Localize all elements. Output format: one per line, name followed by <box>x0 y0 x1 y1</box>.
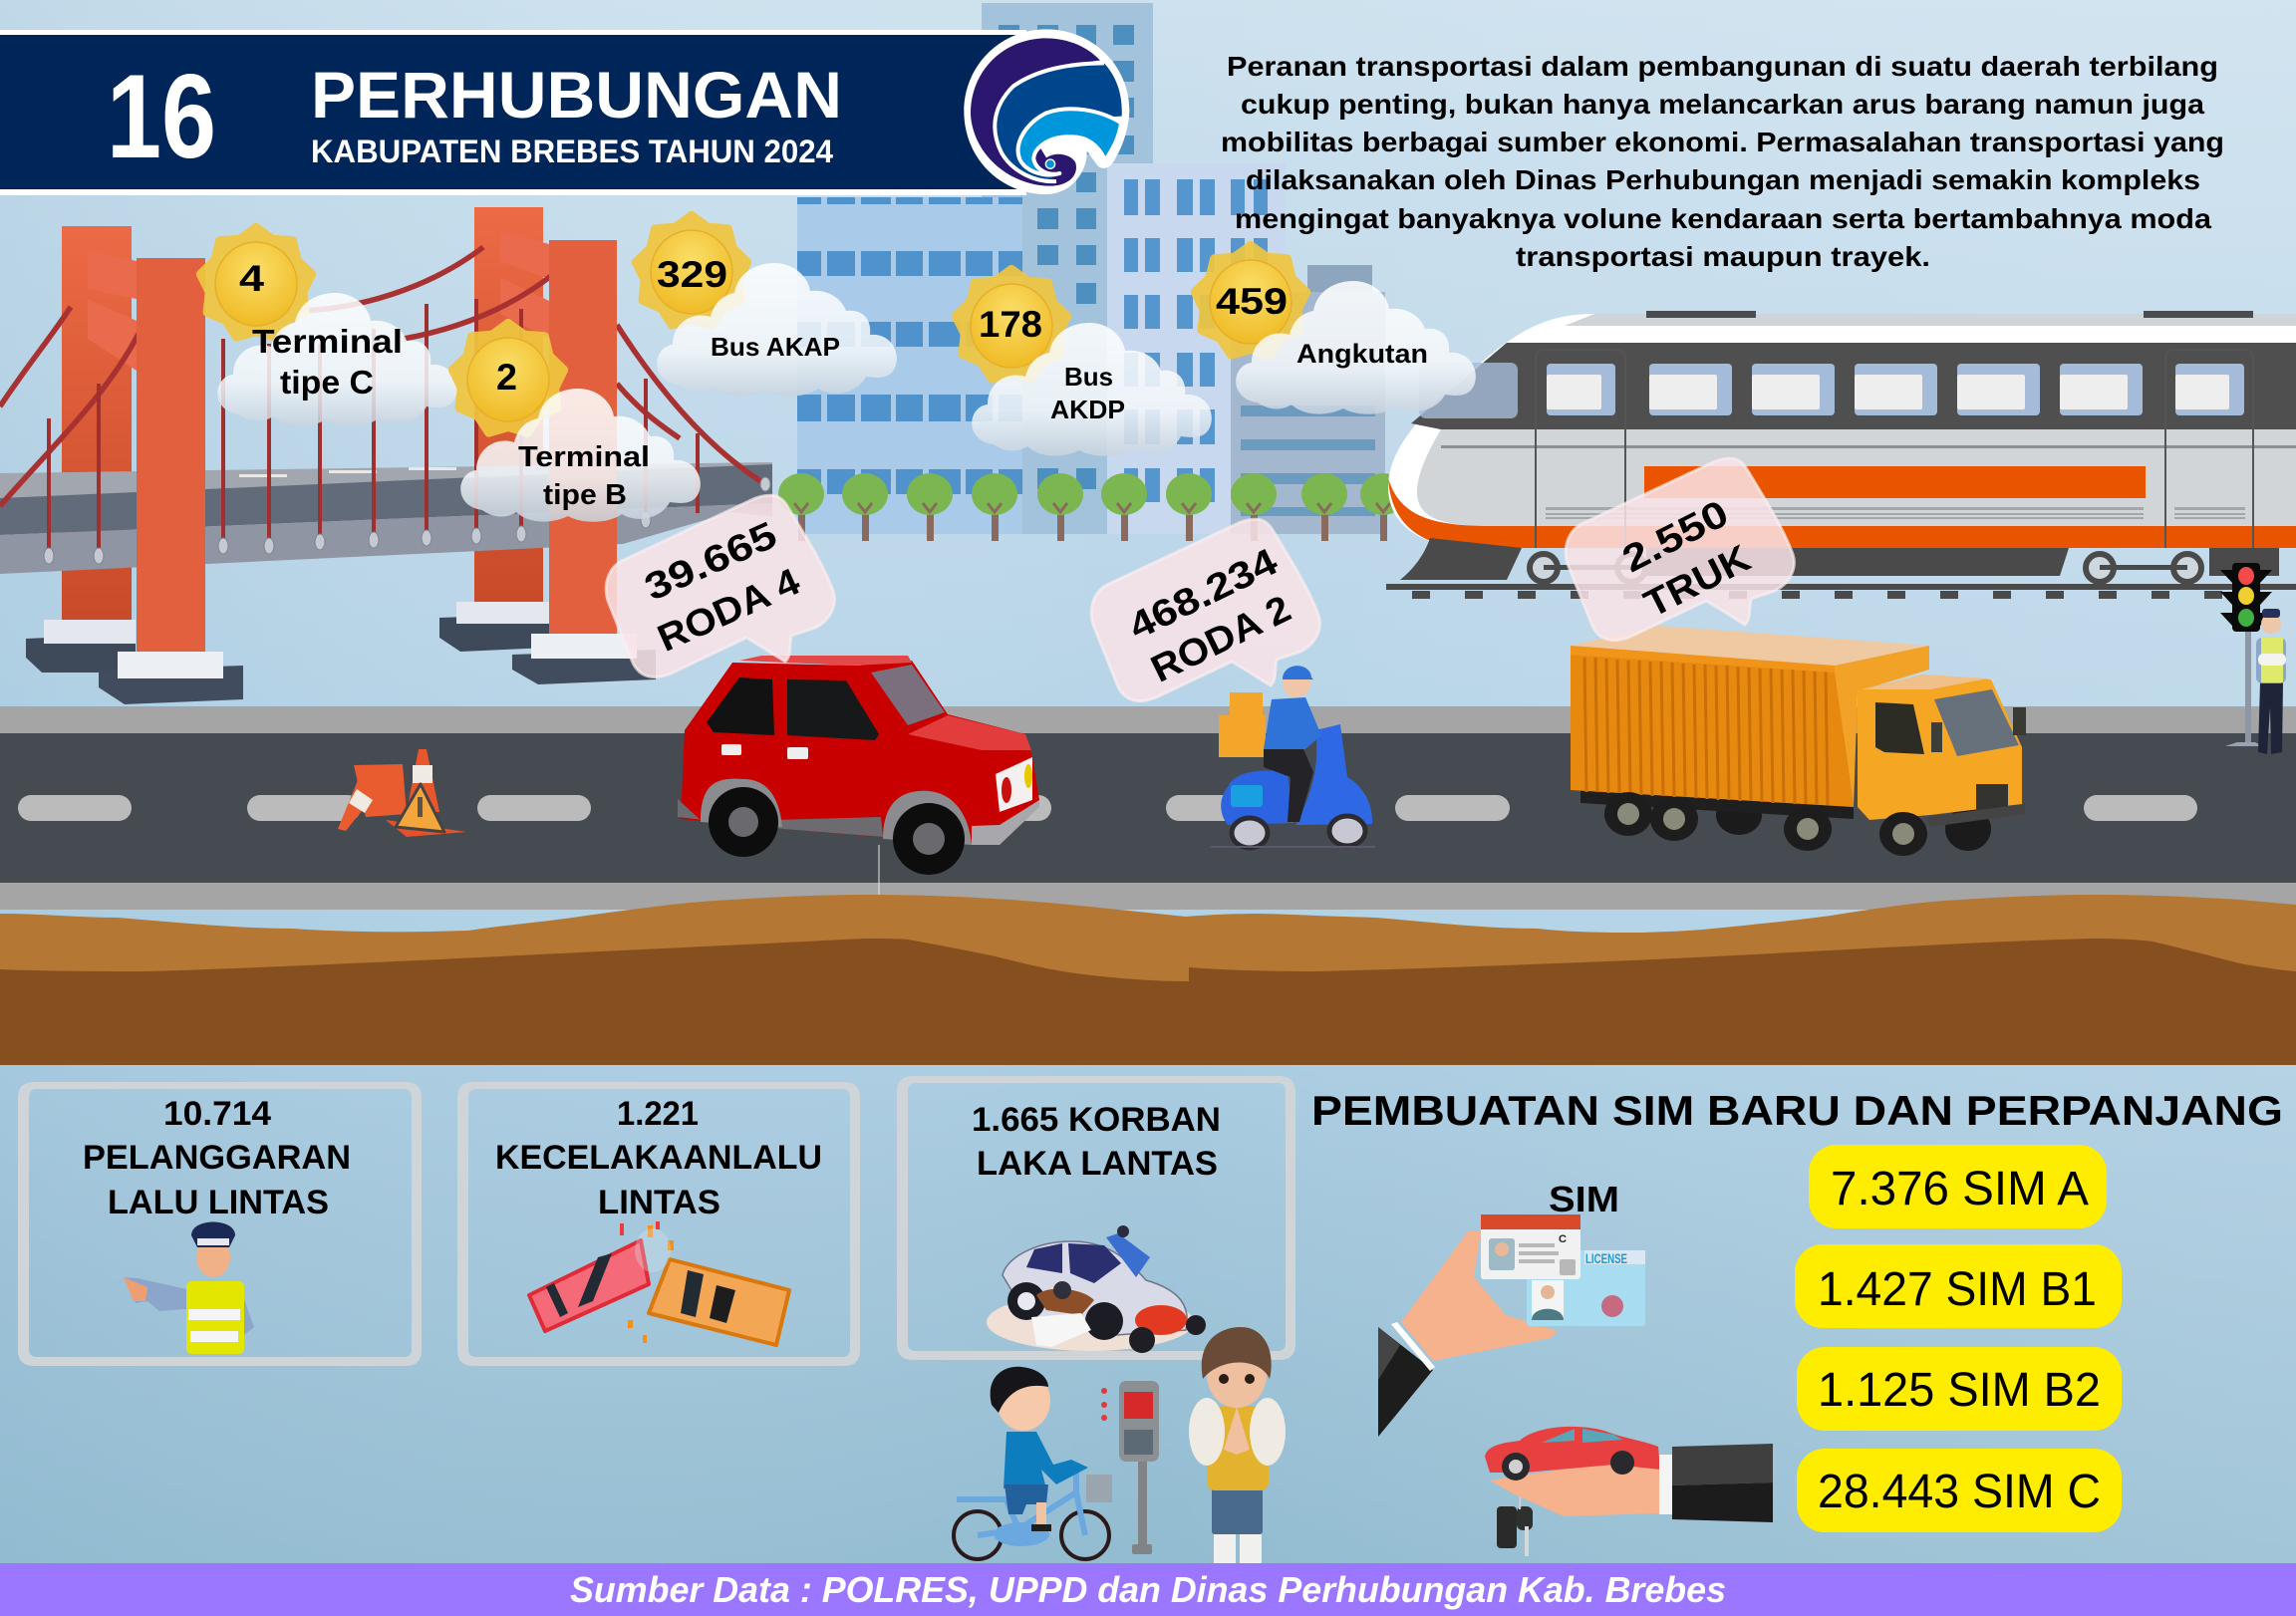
scooter rear body <box>1221 771 1293 825</box>
stat: bus AKDP: AKDP <box>1050 395 1125 424</box>
tower cross beams <box>88 231 549 371</box>
label: SIM: SIM <box>1549 1179 1619 1219</box>
icon: road accident scene <box>987 1225 1206 1353</box>
pill: SIM A: 7.376 SIM A <box>1831 1163 2089 1215</box>
intro paragraph: mobilitas berbagai sumber ekonomi. Permasalahan transportasi yang <box>1221 127 2224 157</box>
panel text: LINTAS <box>598 1184 720 1221</box>
delivery scooter rider <box>1211 666 1375 848</box>
open hand <box>1490 1455 1659 1516</box>
pill: SIM A <box>1809 1145 2107 1228</box>
panel: korban laka lantas <box>897 1076 1295 1360</box>
licence card red <box>1481 1214 1580 1279</box>
stat: angkutan: 459 <box>1216 281 1288 322</box>
stat: bus AKAP: 329 <box>657 254 727 295</box>
car roof <box>739 656 912 666</box>
train stripe and vents <box>1536 350 2253 548</box>
pill: SIM B2: 1.125 SIM B2 <box>1818 1364 2101 1417</box>
stat: bus AKDP <box>957 270 1212 456</box>
pill: SIM B1 <box>1795 1244 2122 1328</box>
intro paragraph: dilaksanakan oleh Dinas Perhubungan menjadi semakin kompleks <box>1246 164 2200 195</box>
licence card blue <box>1527 1250 1645 1326</box>
train <box>1386 311 2296 599</box>
callout: truk <box>1566 458 1794 641</box>
building: grey block <box>1231 265 1385 534</box>
car front panel <box>996 757 1032 812</box>
railway track <box>1386 584 2296 599</box>
car hood <box>908 715 1031 750</box>
stat: bus AKDP: Bus <box>1064 362 1113 392</box>
sleeve <box>1378 1322 1435 1437</box>
hanger anchors <box>44 477 770 564</box>
pill: SIM B2 <box>1797 1347 2122 1431</box>
illustration: hand holding car and keys <box>1485 1427 1773 1556</box>
stat: angkutan <box>1196 246 1476 414</box>
traffic officer <box>2256 609 2286 754</box>
stat: bus AKAP <box>637 216 897 397</box>
panel text <box>495 1095 822 1221</box>
road <box>0 706 2296 910</box>
shirt cuff <box>1659 1455 1672 1514</box>
panel text: 10.714 <box>163 1095 271 1133</box>
greeting boy illustration <box>1189 1327 1286 1563</box>
train windows <box>1419 363 2244 418</box>
car wheels <box>701 779 972 875</box>
train undercarriage <box>1400 538 2279 582</box>
panel text <box>972 1101 1221 1183</box>
rider head <box>1283 666 1313 697</box>
footer source bar: Sumber Data : POLRES, UPPD dan Dinas Perhubungan Kab. Brebes <box>570 1569 1726 1610</box>
ministry logo <box>964 29 1129 194</box>
truck wheels <box>1604 792 1927 856</box>
car windows <box>707 665 945 740</box>
panel text: 1.221 <box>617 1095 699 1133</box>
callout: roda 2: RODA 2 <box>1145 588 1297 691</box>
stat: bus AKAP: Bus AKAP <box>711 332 840 362</box>
hanger cables <box>49 299 698 553</box>
intro paragraph: Peranan transportasi dalam pembangunan di suatu daerah terbilang <box>1227 51 2218 82</box>
pill: SIM B1: 1.427 SIM B1 <box>1818 1263 2097 1316</box>
intro paragraph: transportasi maupun trayek. <box>1516 241 1930 272</box>
panel text: LAKA LANTAS <box>977 1145 1218 1183</box>
panel text: LALU LINTAS <box>108 1184 329 1221</box>
callout: truk: 2.550 <box>1616 493 1735 581</box>
panel text <box>83 1095 351 1221</box>
intro paragraph <box>1221 51 2224 272</box>
truck rear wheels <box>1716 795 1991 851</box>
stat: terminal tipe C: Terminal <box>252 323 403 360</box>
panel text: PELANGGARAN <box>83 1139 351 1177</box>
banner subtitle: KABUPATEN BREBES TAHUN 2024 <box>311 134 833 169</box>
building: tall back tower <box>982 3 1153 534</box>
train roof equipment <box>1646 311 2253 318</box>
callout: roda 4: 39.665 <box>639 514 783 610</box>
city buildings <box>797 3 1385 534</box>
back towers <box>62 207 543 627</box>
footer source bar <box>0 1563 2296 1616</box>
building: light right tower <box>1107 163 1286 534</box>
rider legs <box>1264 749 1313 822</box>
SIM count pills <box>1795 1145 2122 1532</box>
stat: bus AKDP: 178 <box>979 304 1042 345</box>
header banner <box>0 30 1026 195</box>
stat: terminal tipe C <box>201 228 457 426</box>
stat: terminal tipe C: 4 <box>239 258 265 299</box>
panel: pelanggaran lalu lintas <box>18 1082 422 1366</box>
delivery boxes <box>1219 692 1266 757</box>
small red car <box>1485 1427 1660 1481</box>
front towers <box>137 240 617 659</box>
orange truck <box>1571 626 2026 856</box>
callout: truk: TRUK <box>1638 537 1758 626</box>
icon: police officer blowing whistle <box>124 1221 254 1354</box>
callout: roda 2 <box>1091 519 1319 701</box>
section number: 16 <box>107 50 216 183</box>
traffic light <box>2220 563 2272 746</box>
train body <box>1388 314 2296 548</box>
truck chassis <box>1580 790 1854 819</box>
building: wide left block <box>797 197 1022 534</box>
red car <box>678 656 1039 895</box>
banner title: PERHUBUNGAN <box>311 58 842 132</box>
suspension bridge <box>0 207 772 704</box>
callout: roda 4 <box>606 495 834 677</box>
traffic cones and warning sign <box>338 749 466 837</box>
scooter front <box>1295 724 1372 825</box>
ground hills <box>0 895 2296 1065</box>
stat: terminal tipe C: tipe C <box>280 364 374 401</box>
main cables <box>0 247 765 506</box>
stat: terminal tipe B: Terminal <box>518 441 650 473</box>
callout: roda 2: 468.234 <box>1122 541 1285 649</box>
illustration: hand holding licences <box>1378 1214 1645 1437</box>
pill: SIM C: 28.443 SIM C <box>1818 1466 2101 1518</box>
car door handles <box>721 744 808 759</box>
stat: terminal tipe B: 2 <box>496 357 517 398</box>
licence card blue: LICENSE <box>1585 1250 1627 1266</box>
truck cab <box>1858 674 2026 827</box>
pill: SIM C <box>1797 1449 2122 1532</box>
tower bases <box>26 602 656 704</box>
boy rider <box>991 1367 1088 1531</box>
intro paragraph: mengingat banyaknya volune kendaraan serta bertambahnya moda <box>1235 203 2211 234</box>
licence card red: C <box>1559 1233 1567 1245</box>
pedestrian signal <box>1101 1381 1159 1554</box>
stat: terminal tipe B <box>453 324 701 522</box>
stat: angkutan: Angkutan <box>1296 339 1428 369</box>
panel text: KECELAKAANLALU <box>495 1139 822 1177</box>
boy on bicycle illustration <box>954 1367 1112 1559</box>
rider torso <box>1264 697 1321 749</box>
intro paragraph: cukup penting, bukan hanya melancarkan arus barang namun juga <box>1241 89 2204 120</box>
sleeve <box>1672 1444 1773 1522</box>
car body <box>681 661 1039 844</box>
icon: car collision <box>529 1221 789 1345</box>
heading: SIM section: PEMBUATAN SIM BARU DAN PERPANJANG <box>1311 1087 2283 1134</box>
row of trees <box>778 473 1406 541</box>
stat: terminal tipe B: tipe B <box>543 479 627 511</box>
car bumper <box>678 799 883 837</box>
bicycle <box>954 1465 1112 1559</box>
keys <box>1497 1484 1533 1556</box>
cargo container <box>1571 626 1929 807</box>
hand <box>1401 1231 1558 1361</box>
scooter wheels <box>1232 816 1365 848</box>
panel text: 1.665 KORBAN <box>972 1101 1221 1139</box>
scooter shadow <box>1211 846 1375 848</box>
bridge deck <box>0 462 772 574</box>
callout: roda 4: RODA 4 <box>652 561 806 661</box>
panel: kecelakaan lalu lintas <box>457 1082 860 1366</box>
